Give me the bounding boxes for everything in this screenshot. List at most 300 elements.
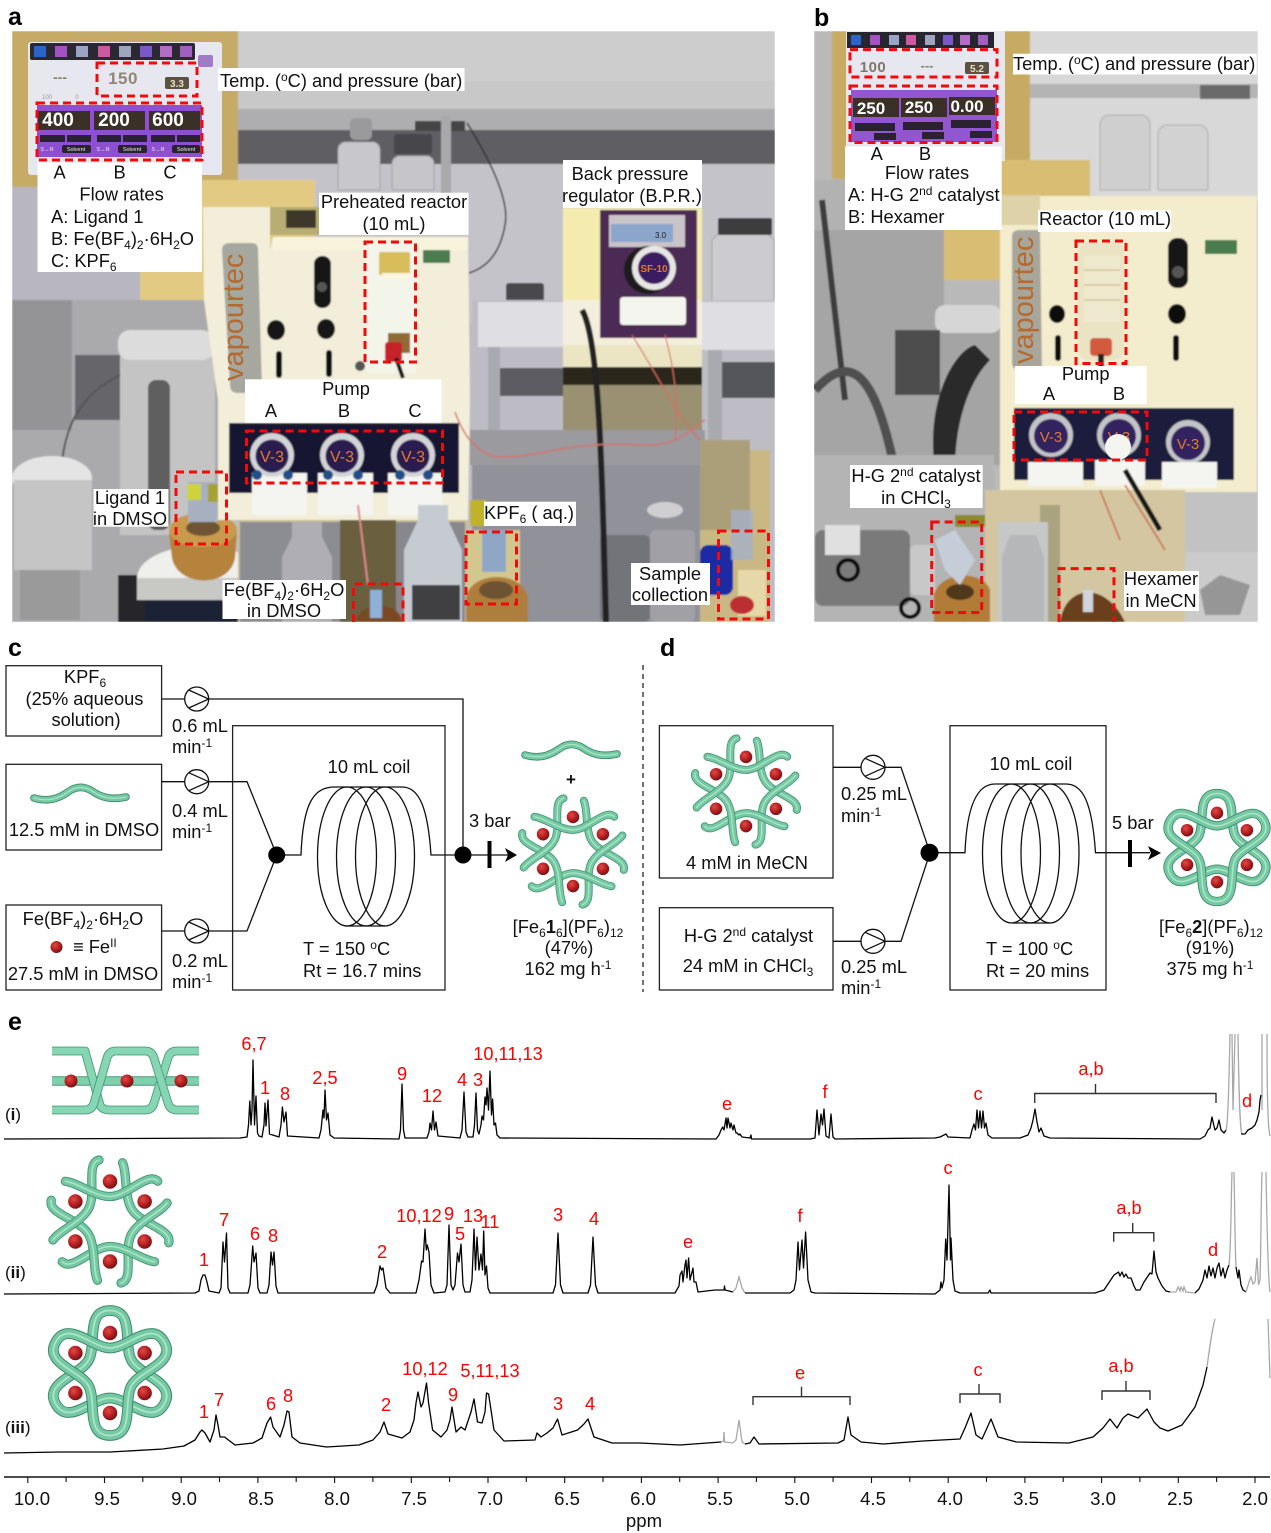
pump panel (1014, 408, 1234, 488)
peak labels ii: a,b (1116, 1198, 1142, 1218)
ppm axis: 2.0 (1242, 1488, 1268, 1509)
feed box: catalyst: nd (733, 925, 746, 939)
divider between schemes (642, 665, 644, 992)
callout: flow rates b: nd (919, 184, 932, 198)
callout: iron salt in DMSO: ·6H (294, 579, 323, 600)
callout: KPF6 aqueous: KPF (484, 502, 520, 523)
flow rate labels (172, 715, 511, 992)
product label c: -1 (601, 958, 612, 972)
flow rate labels: -1 (201, 736, 212, 750)
photo b background: V-3 (1108, 429, 1130, 446)
feed box: catalyst: 24 mM in CHCl (683, 955, 807, 976)
peak labels iii: a,b (1108, 1356, 1134, 1376)
coil box: Rt = 16.7 mins (303, 960, 421, 981)
callout: flow rates b: catalyst (932, 184, 1000, 205)
product label c: 1 (546, 916, 556, 937)
callout: ligand in DMSO (93, 487, 168, 529)
peak labels ii: 8 (268, 1226, 278, 1246)
peak labels iii: 7 (214, 1390, 224, 1410)
monitor screen: Solvent (177, 147, 196, 153)
mixing nodes (268, 846, 472, 864)
callout: catalyst in chloroform: catalyst (914, 465, 981, 486)
peak labels i (241, 1034, 1252, 1114)
ppm axis: 3.5 (1013, 1488, 1039, 1509)
callout: pump b: B (1113, 383, 1125, 404)
product label c: 6 (556, 926, 563, 940)
pump symbols d (861, 755, 885, 953)
ppm axis: 10.0 (14, 1488, 50, 1509)
monitor screen: 600 (152, 110, 184, 131)
callout: catalyst in chloroform: 3 (944, 497, 951, 511)
peak labels iii: 6 (266, 1394, 276, 1414)
feed box: iron salt (6, 905, 162, 990)
peak labels iii: 10,12 (402, 1359, 448, 1379)
feed box: iron salt: 2 (86, 918, 93, 932)
panel label d: d (660, 634, 675, 662)
monitor screen b: 250 (857, 99, 885, 118)
monitor screen: 200 (98, 110, 130, 131)
monitor screen: S→R (151, 147, 165, 153)
ppm axis: 8.5 (248, 1488, 274, 1509)
monitor screen: Solvent (123, 147, 142, 153)
monitor screen b (846, 31, 1005, 161)
callout: sample collection (631, 563, 710, 605)
callout: preheated reactor: Preheated reactor (321, 191, 467, 212)
product label d: 6 (1237, 926, 1244, 940)
product label c: 6 (539, 926, 546, 940)
callout: iron salt in DMSO: O (330, 579, 344, 600)
ppm axis: ppm (626, 1510, 662, 1531)
peak labels ii: 2 (377, 1242, 387, 1262)
product label d (1159, 916, 1263, 979)
photo a background: vapourtec (218, 254, 250, 381)
product label c: [Fe (513, 916, 539, 937)
peak labels iii: 5,11,13 (460, 1361, 520, 1381)
photo b background: vapourtec (1008, 237, 1040, 364)
product: strand plus open hexamer (504, 744, 642, 921)
product label c: 12 (610, 926, 624, 940)
label ii: (ii) (5, 1263, 26, 1282)
flow rate labels d: 0.25 mL (841, 956, 907, 977)
brackets iii (753, 1381, 1150, 1405)
callout: flow rates: Flow rates (79, 184, 164, 205)
monitor screen: 400 (42, 110, 74, 131)
photo a background: V-3 (401, 449, 425, 466)
machine (1000, 196, 1257, 492)
product label d: 375 mg h (1167, 958, 1243, 979)
callout: pump b (1015, 363, 1147, 404)
monitor screen: 0 (75, 95, 79, 101)
monitor screen (28, 42, 222, 175)
peak labels ii: 3 (553, 1205, 563, 1225)
peak labels ii: 5 (455, 1224, 465, 1244)
flow rate labels: -1 (201, 971, 212, 985)
peak labels ii: 7 (219, 1210, 229, 1230)
callout: preheated reactor (319, 191, 468, 235)
ppm axis: 7.0 (477, 1488, 503, 1509)
peak labels i: d (1242, 1091, 1252, 1111)
highlight boxes a (37, 63, 768, 622)
black cable (582, 310, 606, 622)
machine body (203, 207, 470, 520)
trace i (4, 1034, 1270, 1139)
callout: flow rates b (845, 143, 1002, 230)
flow rate labels: -1 (201, 821, 212, 835)
flow rate labels d: -1 (870, 805, 881, 819)
feed box: KPF6: (25% aqueous (26, 688, 143, 709)
feed box: KPF6: 6 (99, 676, 106, 690)
peak labels ii (199, 1158, 1218, 1270)
callout: pump: A (265, 400, 278, 421)
product label d: ) (1244, 916, 1250, 937)
ppm axis: 2.5 (1167, 1488, 1193, 1509)
peak labels ii: 4 (589, 1209, 599, 1229)
peak labels i: e (722, 1094, 732, 1114)
callout: flow rates: A (53, 162, 66, 182)
flow rate labels d: -1 (870, 977, 881, 991)
product label d: 6 (1185, 926, 1192, 940)
panel label a: a (8, 3, 23, 31)
peak labels ii: 10,12 (396, 1206, 442, 1226)
coil box d: o (1053, 938, 1060, 952)
callout: flow rates: 2 (173, 238, 180, 252)
callout: catalyst in chloroform: nd (900, 465, 914, 479)
callout: flow rates b: A (871, 143, 884, 164)
callout: iron salt in DMSO: 2 (287, 589, 294, 603)
coil box d: Rt = 20 mins (986, 960, 1089, 981)
coil box d: C (1060, 938, 1073, 959)
peak labels i: 12 (422, 1086, 442, 1106)
callout: back pressure regulator: regulator (B.P.R.) (562, 185, 702, 206)
flow lines (162, 699, 510, 931)
coil box d: 10 mL coil (990, 753, 1072, 774)
molecule: linear strand assembly (52, 1051, 199, 1110)
peak labels i: 8 (280, 1084, 290, 1104)
callout: pump b: Pump (1062, 363, 1110, 384)
peak labels ii: 13 (463, 1206, 483, 1226)
flow rate labels d: min (841, 805, 870, 826)
callout: flow rates: 6 (110, 260, 117, 274)
callout: pump: Pump (322, 378, 370, 399)
feed box: hexamer (659, 722, 833, 878)
callout: back pressure regulator (562, 160, 702, 208)
callout: catalyst in chloroform: H-G 2 (851, 465, 900, 486)
photo a background: SF-10 (640, 264, 668, 275)
callout: flow rates: ) (131, 228, 137, 249)
callout: temperature and pressure b: Temp. ( (1013, 53, 1074, 74)
feed box: catalyst: H-G 2 (684, 925, 733, 946)
callout: iron salt in DMSO: 2 (323, 589, 330, 603)
photo a background (12, 31, 775, 622)
regulator (600, 210, 700, 440)
peak labels ii: 6 (250, 1224, 260, 1244)
feed box: iron salt: O (129, 908, 143, 929)
bottles lower right (600, 535, 650, 622)
product label c: ) (604, 916, 610, 937)
photo b background: V-3 (1177, 436, 1199, 453)
peak labels i: 4 (457, 1070, 467, 1090)
ppm axis: 8.0 (324, 1488, 350, 1509)
peak labels i: a,b (1078, 1059, 1104, 1079)
feed box: iron salt: 2 (122, 918, 129, 932)
callout: iron salt in DMSO (222, 579, 346, 621)
peak labels i: 10,11,13 (473, 1044, 543, 1064)
ppm axis: 9.0 (171, 1488, 197, 1509)
feed box: ligand: 12.5 mM in DMSO (9, 819, 159, 840)
callout: ligand in DMSO: Ligand 1 (95, 487, 165, 508)
product label c: 6 (597, 926, 604, 940)
panel b: flow setup photo (814, 31, 1258, 622)
flow rate labels d: 0.25 mL (841, 783, 907, 804)
feed box: iron salt: Fe(BF (23, 908, 73, 929)
callout: preheated reactor: (10 mL) (362, 213, 426, 234)
callout: hexamer in acetonitrile: in MeCN (1125, 590, 1197, 611)
photo b background (814, 31, 1258, 622)
callout: catalyst in chloroform: in CHCl (881, 487, 944, 508)
callout: temperature and pressure b: o (1074, 53, 1081, 67)
feed box: iron salt: 4 (73, 918, 80, 932)
monitor screen b: 5.2 (970, 64, 984, 75)
callout: flow rates: O (180, 228, 194, 249)
bracket i (1035, 1084, 1216, 1103)
product: closed knot (1163, 778, 1271, 907)
peak labels i: 6,7 (241, 1034, 267, 1054)
panel e: NMR spectra (4, 1034, 1270, 1531)
ppm axis: 4.5 (860, 1488, 886, 1509)
reactor (1078, 242, 1124, 368)
panel d: flow scheme (659, 722, 1271, 998)
callout: KPF6 aqueous: ( aq.) (526, 502, 574, 523)
callout: flow rates: C (163, 162, 177, 182)
callout: KPF6 aqueous (484, 502, 576, 526)
feed box: hexamer: 4 mM in MeCN (686, 852, 808, 873)
peak labels iii: c (973, 1360, 983, 1380)
monitor screen: 100 (42, 95, 53, 101)
flow rate labels d: min (841, 977, 870, 998)
callout: flow rates: B: Fe(BF (51, 228, 124, 249)
callout: flow rates: A: Ligand 1 (51, 206, 144, 227)
feed box: KPF6 (6, 666, 162, 736)
feed box: catalyst: 3 (807, 965, 814, 979)
feed box: ligand (6, 764, 162, 850)
ppm axis: 3.0 (1090, 1488, 1116, 1509)
bench (985, 490, 1185, 622)
right half (506, 298, 544, 303)
callout: iron salt in DMSO: 4 (274, 589, 281, 603)
peak labels iii (199, 1356, 1134, 1422)
spectrum ii (4, 1141, 1270, 1302)
callout: flow rates b: Flow rates (885, 162, 969, 183)
peak labels ii: 1 (199, 1250, 209, 1270)
molecule: closed knot (47, 1293, 192, 1442)
callout: temperature and pressure b: C) and pressure (bar) (1081, 53, 1255, 74)
callout: catalyst in chloroform (850, 465, 983, 511)
back pressure regulator bar and arrow d (1128, 840, 1161, 867)
monitor screen b: 250 (905, 98, 933, 117)
flow rate labels d: 5 bar (1112, 812, 1154, 833)
callout: temperature and pressure: C) and pressure (bar) (288, 70, 462, 91)
panel c: flow scheme (6, 666, 642, 992)
callout: sample collection: Sample (639, 563, 701, 584)
ppm axis: 7.5 (401, 1488, 427, 1509)
flow lines d (833, 767, 1150, 941)
callout: flow rates: 2 (137, 238, 144, 252)
back pressure regulator bar and arrow (488, 841, 517, 868)
callout: flow rates b: B (919, 143, 931, 164)
peak labels iii: 2 (381, 1395, 391, 1415)
callout: temperature and pressure (218, 68, 464, 91)
coil box: T = 150 (303, 938, 365, 959)
callout: iron salt in DMSO: ) (281, 579, 287, 600)
callout: flow rates: C: KPF (51, 250, 110, 271)
callout: back pressure regulator: Back pressure (572, 163, 688, 184)
monitor screen: --- (53, 69, 67, 85)
label iii: (iii) (5, 1418, 31, 1437)
peak labels ii: d (1208, 1240, 1218, 1260)
photo a background: V-3 (260, 449, 284, 466)
ppm axis: 5.0 (784, 1488, 810, 1509)
photo a background: V-3 (330, 449, 354, 466)
monitor screen: Solvent (67, 147, 86, 153)
ppm axis (4, 1477, 1270, 1531)
trace ii (4, 1172, 1270, 1294)
monitor screen b: 100 (860, 59, 886, 76)
feed box: iron salt: II (110, 936, 117, 950)
peak labels iii: 8 (283, 1386, 293, 1406)
callout: pump (245, 378, 442, 423)
bracket ii (1114, 1223, 1154, 1242)
flow rate labels d (841, 783, 1154, 998)
peak labels iii: 4 (585, 1394, 595, 1414)
callout: iron salt in DMSO: in DMSO (247, 600, 321, 621)
product label d: ](PF (1202, 916, 1237, 937)
callout: flow rates: B (113, 162, 126, 182)
flow rate labels: min (172, 821, 201, 842)
feed box: KPF6: KPF (64, 666, 99, 687)
callout: temperature and pressure: Temp. ( (220, 70, 281, 91)
feed box: iron salt: ·6H (93, 908, 122, 929)
callout: iron salt in DMSO: Fe(BF (224, 579, 274, 600)
coil box: C (377, 938, 390, 959)
feed box: iron salt: ) (80, 908, 86, 929)
highlight boxes b (850, 50, 1147, 622)
photo b background: V-3 (1040, 429, 1062, 446)
flow rate labels: 3 bar (469, 810, 511, 831)
panel a: flow setup photo (12, 31, 775, 622)
ppm axis: 4.0 (937, 1488, 963, 1509)
peak labels iii: 1 (199, 1402, 209, 1422)
mixing node d (920, 844, 938, 862)
feed box: iron salt: 27.5 mM in DMSO (8, 963, 158, 984)
coil box: 10 mL coil (328, 756, 410, 777)
peak labels iii: e (795, 1363, 805, 1383)
peak labels ii: 9 (444, 1204, 454, 1224)
trace iii (4, 1319, 1270, 1453)
ppm axis: 9.5 (94, 1488, 120, 1509)
product label d: [Fe (1159, 916, 1185, 937)
callout: sample collection: collection (632, 584, 708, 605)
product label d: 2 (1192, 916, 1202, 937)
product: strand plus open hexamer: + (566, 770, 576, 789)
peak labels i: 1 (260, 1078, 270, 1098)
panel label b: b (814, 4, 829, 32)
callout: flow rates (38, 162, 202, 274)
pump symbols (185, 687, 209, 943)
callout: temperature and pressure: o (281, 70, 288, 84)
peak labels ii: c (943, 1158, 953, 1178)
callout: flow rates b: A: H-G 2 (848, 184, 919, 205)
product label c: 162 mg h (525, 958, 601, 979)
panel label c: c (8, 634, 22, 662)
monitor screen: S→R (96, 147, 110, 153)
product label d: 12 (1250, 926, 1263, 940)
feed box: catalyst: catalyst (746, 925, 813, 946)
product label c (513, 916, 624, 979)
callout: KPF6 aqueous: 6 (520, 512, 527, 526)
pump panel (229, 423, 459, 515)
callout: pump: C (408, 400, 422, 421)
feed box: catalyst (659, 908, 833, 990)
flow rate labels: 0.6 mL (172, 715, 228, 736)
reactor (366, 243, 450, 378)
feed box: KPF6: solution) (51, 709, 121, 730)
monitor screen b: --- (920, 58, 934, 73)
peak labels ii: e (683, 1232, 693, 1252)
monitor screen: S→R (40, 147, 54, 153)
molecule: open hexamer (30, 1141, 190, 1302)
feed box: iron salt: ≡ Fe (73, 936, 110, 957)
photo a background: 3.0 (655, 231, 667, 240)
spectrum i (4, 1034, 1270, 1139)
lower centre (238, 520, 468, 622)
callout: pump b: A (1043, 383, 1056, 404)
peak labels i: 3 (473, 1070, 483, 1090)
peak labels iii: 9 (448, 1385, 458, 1405)
ppm axis: 6.5 (554, 1488, 580, 1509)
coil box d: T = 100 (986, 938, 1048, 959)
flow rate labels: 0.4 mL (172, 800, 228, 821)
callout: pump: B (338, 400, 350, 421)
monitor screen b: 0.00 (950, 97, 984, 116)
cork holders (934, 576, 990, 622)
peak labels ii: f (797, 1206, 803, 1226)
peak labels i: 9 (397, 1064, 407, 1084)
ppm axis: 5.5 (707, 1488, 733, 1509)
peak labels iii: 3 (553, 1394, 563, 1414)
panel label e: e (8, 1008, 22, 1036)
callout: flow rates b: B: Hexamer (848, 206, 945, 227)
coil box d (950, 726, 1106, 990)
product label d: (91%) (1186, 937, 1234, 958)
monitor screen: 3.3 (170, 79, 184, 90)
coil box (233, 726, 445, 990)
flow rate labels: min (172, 736, 201, 757)
peak labels ii: 11 (481, 1212, 499, 1232)
callout: flow rates: 4 (124, 238, 131, 252)
flow rate labels: 0.2 mL (172, 950, 228, 971)
label i: (i) (5, 1105, 21, 1124)
callout: reactor: Reactor (10 mL) (1039, 208, 1171, 229)
peak labels i: 2,5 (312, 1068, 338, 1088)
callout: hexamer in acetonitrile: Hexamer (1124, 568, 1198, 589)
peak labels i: c (973, 1084, 983, 1104)
product label c: ](PF (563, 916, 597, 937)
coil box: o (370, 938, 377, 952)
callout: hexamer in acetonitrile (1124, 568, 1199, 611)
ppm axis: 6.0 (630, 1488, 656, 1509)
spectrum iii (4, 1293, 1270, 1453)
product label d: -1 (1243, 958, 1254, 972)
